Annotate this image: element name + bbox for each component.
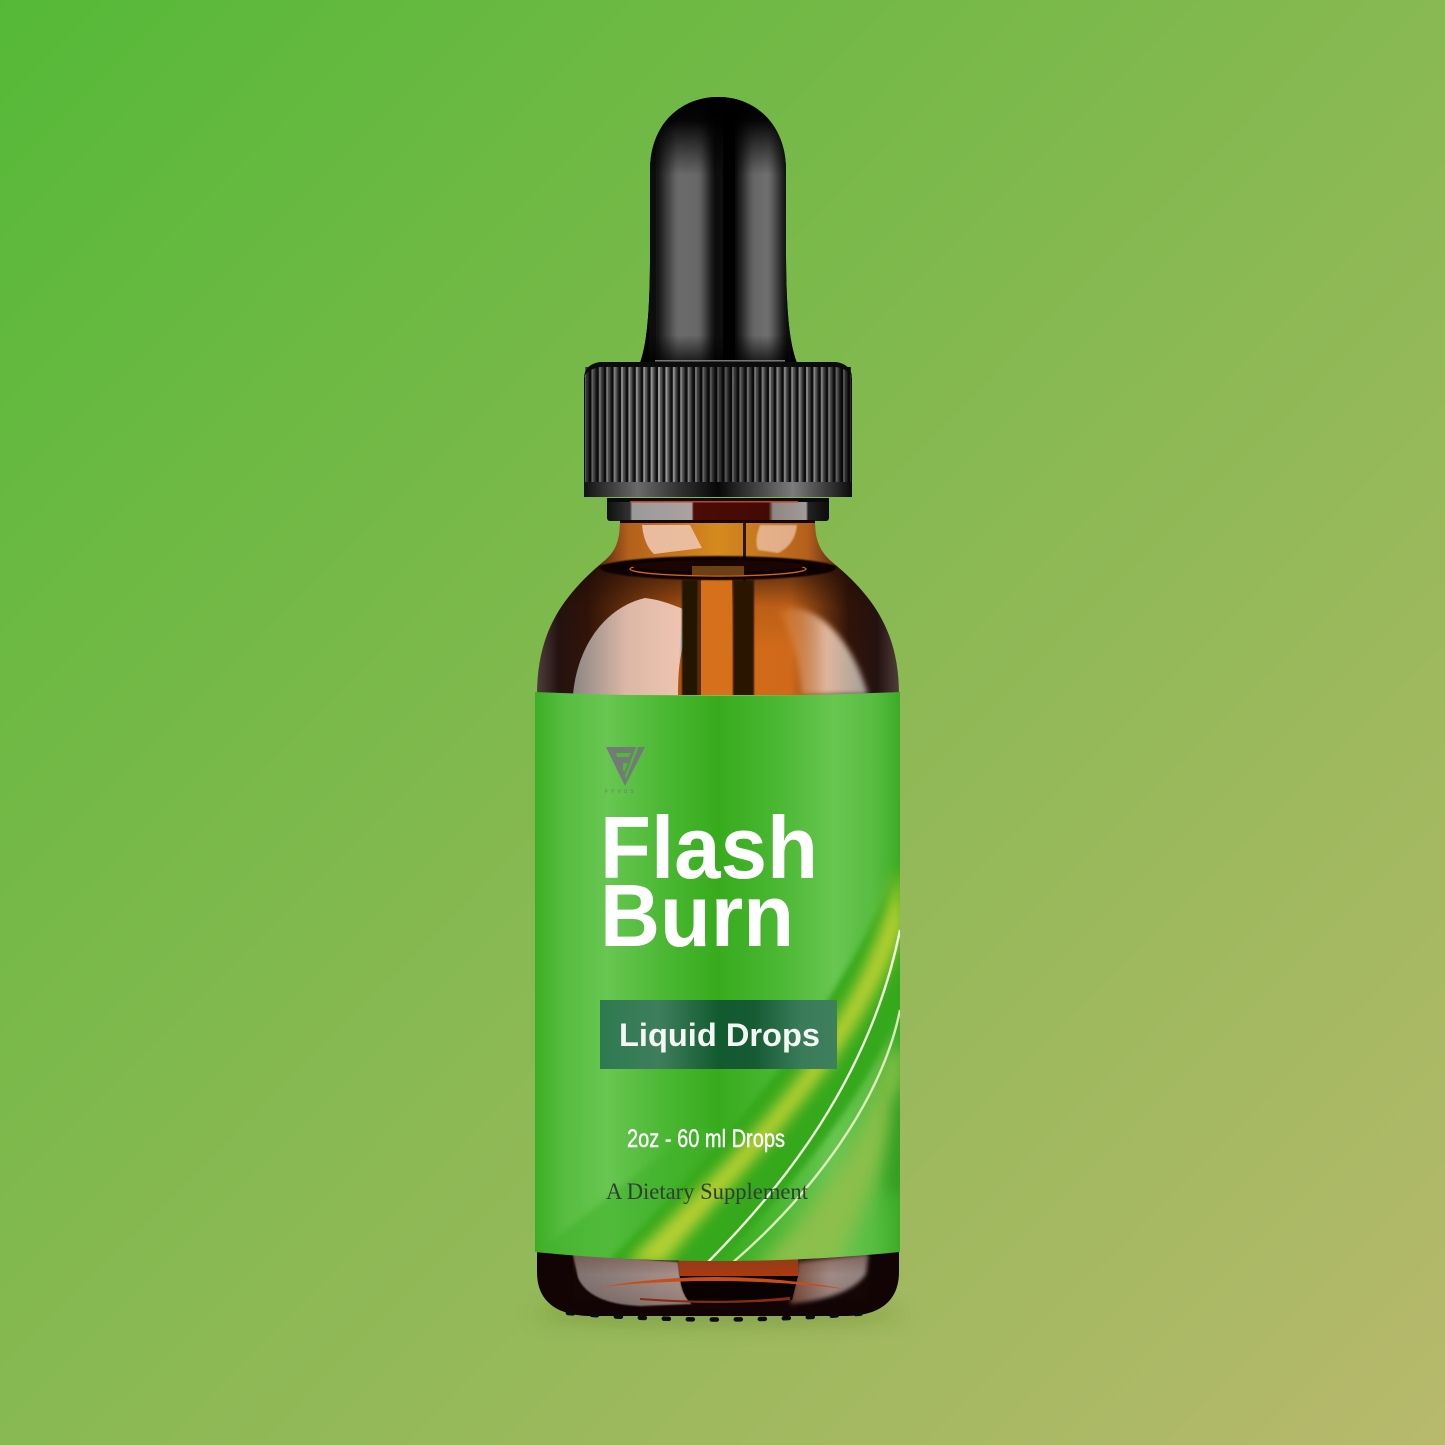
yellow swoosh	[626, 866, 904, 1264]
white swoosh lines	[706, 930, 900, 1264]
ground shadow	[533, 1304, 903, 1324]
brand logo: FYVUS	[605, 789, 637, 795]
liquid drops badge	[600, 1000, 837, 1069]
supplement text: A Dietary Supplement	[606, 1179, 809, 1204]
olive swoosh panel	[752, 1050, 903, 1270]
volume text: 2oz - 60 ml Drops	[627, 1125, 785, 1153]
dropper rubber bulb	[640, 97, 797, 362]
amber glass base	[530, 1250, 906, 1320]
glass shoulder and neck	[530, 520, 906, 700]
lower left diagonal shade	[537, 1161, 668, 1260]
product name: Burn	[600, 866, 794, 965]
brand logo	[605, 747, 645, 795]
right edge shade	[877, 1083, 900, 1196]
liquid drops badge: Liquid Drops	[619, 1017, 820, 1053]
ribbed dropper cap	[584, 362, 852, 497]
dark swoosh shade	[600, 860, 905, 1270]
neck collar ring	[607, 498, 829, 523]
product name: Flash	[600, 798, 818, 897]
product name	[600, 798, 818, 965]
product label	[530, 688, 915, 1278]
